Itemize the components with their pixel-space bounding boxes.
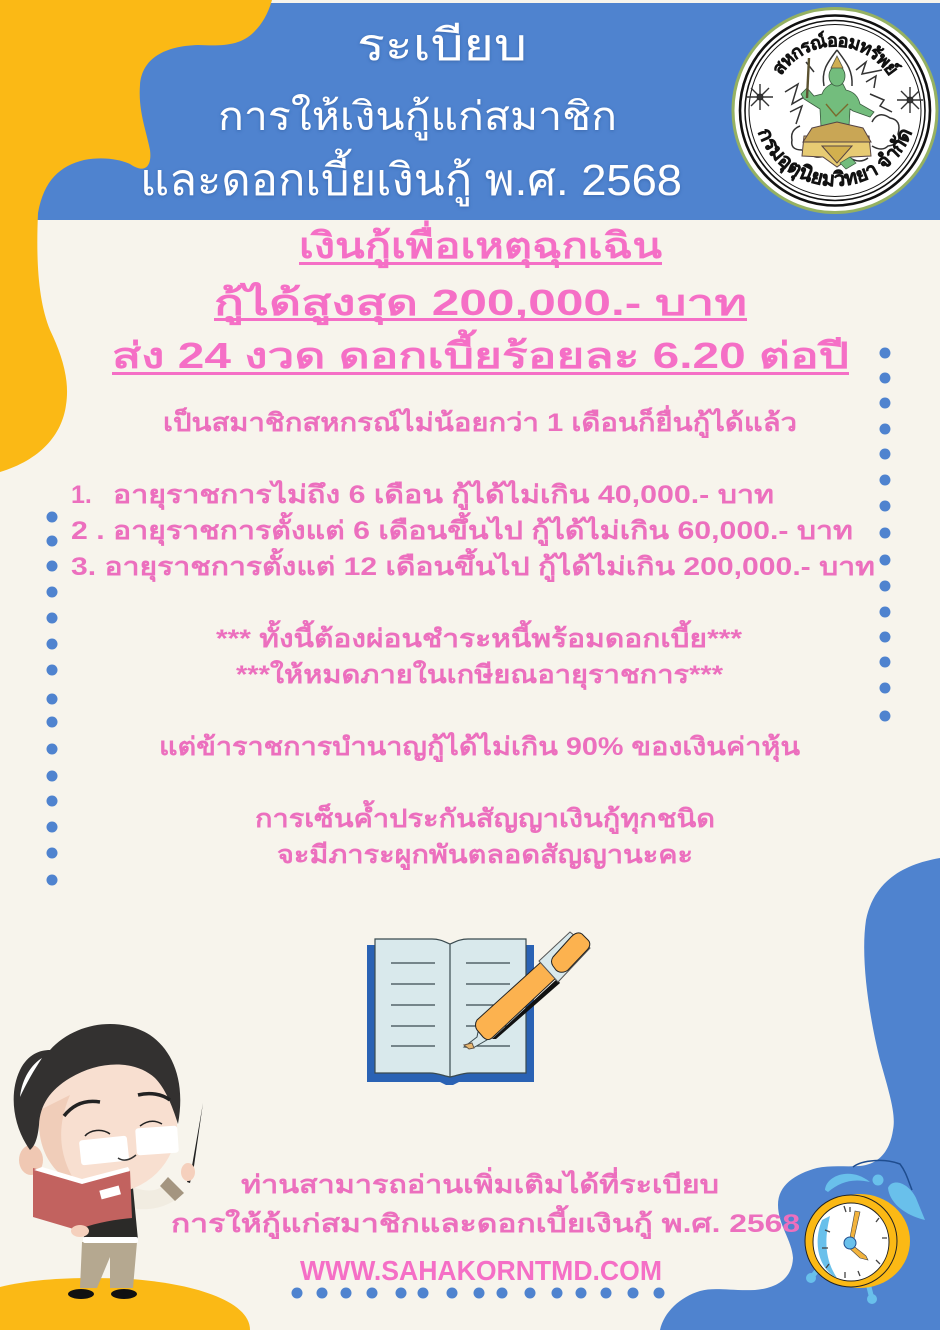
wand (807, 58, 809, 98)
yellow blob bottom left (0, 1278, 250, 1330)
text block: guarantee: จะมีภาระผูกพันตลอดสัญญานะคะ (277, 841, 693, 871)
trousers (80, 1242, 137, 1288)
list: loan limits by service length: อายุราชการไม่ถึง 6 เดือน กู้ได้ไม่เกิน 40,000.- บาท (113, 479, 774, 511)
blue blob bottom right (660, 858, 940, 1330)
text block: read more: ท่านสามารถอ่านเพิ่มเติมได้ที่ระเบียบ (241, 1167, 719, 1199)
ticks (822, 1206, 887, 1278)
text block: guarantee (255, 799, 715, 871)
eyebrows (64, 1094, 170, 1116)
character: teacher with book and pointer (14, 1024, 203, 1299)
list: loan limits by service length: 1. (71, 481, 92, 509)
panel: blue header band (0, 3, 940, 220)
seal name: bottom arc: กรมอุตุนิยมวิทยา จำกัด (758, 129, 912, 187)
bell handle (853, 1160, 912, 1190)
feet (806, 1273, 816, 1283)
icon: open book and marker (367, 932, 590, 1085)
dots: left column (46, 512, 58, 886)
list: loan limits by service length: 3. อายุราชการตั้งแต่ 12 เดือนขึ้นไป กู้ได้ไม่เกิน 200,000.- บาท (71, 547, 875, 583)
heading: emergency loan: กู้ได้สูงสุด 200,000.- บาท (214, 281, 747, 326)
dots: bottom row (292, 1288, 664, 1298)
clock hands (849, 1211, 860, 1243)
yellow blob top left (0, 0, 272, 472)
text block: pensioners: แต่ข้าราชการบำนาญกู้ได้ไม่เกิน 90% ของเงินค่าหุ้น (159, 731, 800, 763)
text block: guarantee: การเซ็นค้ำประกันสัญญาเงินกู้ทุกชนิด (255, 799, 715, 835)
pointer (187, 1103, 203, 1183)
deity figure (801, 84, 874, 127)
bells (825, 1174, 870, 1192)
marker (464, 1027, 492, 1048)
icon: alarm clock (805, 1160, 925, 1304)
star ornaments (756, 94, 764, 100)
title: ระเบียบ (357, 21, 527, 70)
text block: eligibility: เป็นสมาชิกสหกรณ์ไม่น้อยกว่า 1 เดือนก็ยื่นกู้ได้แล้ว (163, 405, 797, 439)
text block: repayment note (216, 619, 742, 691)
heading: emergency loan: ส่ง 24 งวด ดอกเบี้ยร้อยละ 6.20 ต่อปี (112, 329, 849, 376)
title (140, 21, 682, 207)
text block: repayment note: ***ให้หมดภายในเกษียณอายุราชการ*** (236, 659, 723, 691)
dots: right column (880, 348, 890, 722)
seated base (802, 136, 871, 167)
text block: repayment note: *** ทั้งนี้ต้องผ่อนชำระหนี้พร้อมดอกเบี้ย*** (216, 619, 742, 653)
arm and shirt (130, 1186, 178, 1209)
website url: WWW.SAHAKORNTMD.COM (300, 1255, 662, 1286)
title: และดอกเบี้ยเงินกู้ พ.ศ. 2568 (140, 148, 682, 207)
shoes (68, 1289, 94, 1299)
text block: read more (171, 1167, 800, 1240)
title: การให้เงินกู้แก่สมาชิก (218, 93, 617, 140)
seal name: top arc: สหกรณ์ออมทรัพย์ (774, 30, 903, 76)
ear (19, 1145, 43, 1175)
hair (14, 1024, 180, 1150)
glasses (79, 1136, 129, 1165)
text block: read more: การให้กู้แก่สมาชิกและดอกเบี้ยเงินกู้ พ.ศ. 2568 (171, 1204, 800, 1240)
lightning and clouds (785, 50, 899, 161)
clock face (813, 1203, 889, 1281)
logo: cooperative seal (732, 7, 938, 214)
heading: emergency loan: เงินกู้เพื่อเหตุฉุกเฉิน (299, 220, 662, 269)
list: loan limits by service length (71, 479, 875, 583)
list: loan limits by service length: 2 . อายุราชการตั้งแต่ 6 เดือนขึ้นไป กู้ได้ไม่เกิน 60,000.- บาท (71, 511, 853, 547)
head face (39, 1057, 177, 1193)
body vest (82, 1188, 138, 1240)
heading: emergency loan (112, 220, 849, 376)
clock body (810, 1194, 910, 1288)
open red book (33, 1168, 132, 1230)
